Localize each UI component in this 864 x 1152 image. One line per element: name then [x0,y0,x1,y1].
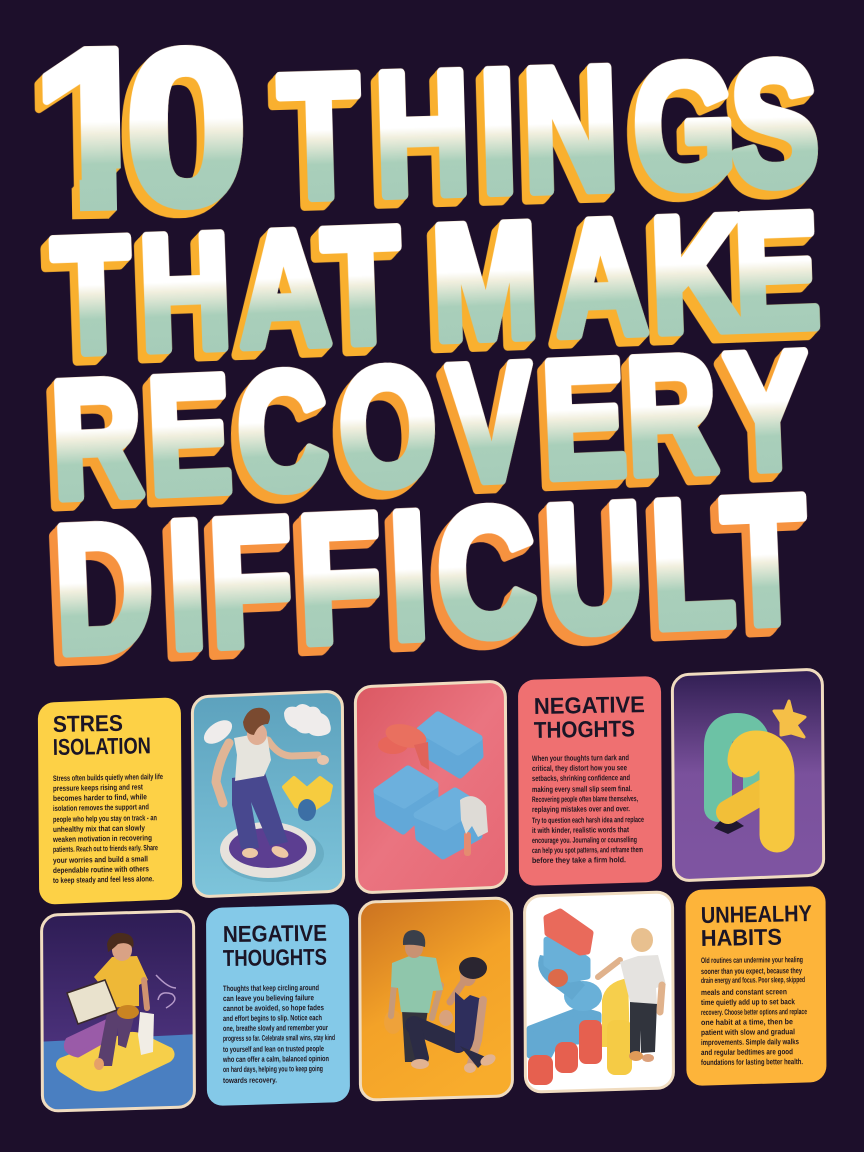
person with book [67,933,154,1070]
panel: person balancing illustration [190,690,346,898]
panel: negative thoughts blue text card: Thoughts that keep circling around [223,983,319,993]
panel: negative thoughts red text card: When your thoughts turn dark and [532,753,629,763]
panel: negative thoughts red text card: can help you spot patterns, and reframe them [532,845,643,855]
title line: RECOVERY: RECOVERY [48,316,813,534]
panel: unhealthy habits text card: meals and constant screen [701,987,787,997]
panel: negative thoughts blue text card: THOUGHTS [223,944,327,971]
panel: negative thoughts red text card: it with kinder, realistic words that [532,825,629,835]
panel: stress isolation text card: dependable routine with others [53,864,150,875]
panel: stress isolation text card: patients. Reach out to friends early. Share [53,843,158,854]
panel: negative thoughts blue text card: cannot be avoided, so hope fades [223,1003,325,1013]
standing person with glasses [598,928,666,1062]
panel: negative thoughts blue text card: to yourself and lean on trusted people [223,1044,324,1054]
icon: yellow arch [602,978,630,1047]
panel: negative thoughts red text card: before they take a firm hold. [532,855,626,865]
panel: green and yellow arches illustration [670,668,826,882]
icon: stacked blue shapes [530,938,602,1055]
panel: negative thoughts red text card: NEGATIVE [534,691,645,719]
panel: stress isolation text card: becomes harder to find, while [53,792,148,803]
panel: stress isolation text card [38,697,182,905]
panel: unhealthy habits text card: sooner than you expect, because they [701,966,802,976]
icon: pale squiggle [156,975,176,1008]
panel: negative thoughts red text card [518,676,662,886]
icon: clouds [204,704,331,744]
title digit: 0: 0 [123,3,250,253]
panel: negative thoughts red text card: Recovering people often blame themselves, [532,794,638,804]
panel: negative thoughts blue text card: and effort begins to slip. Notice each [223,1013,322,1023]
panel: unhealthy habits text card: drain energy and focus. Poor sleep, skipped [701,975,805,985]
panel: person with book illustration [40,910,196,1112]
panel: unhealthy habits text card: HABITS [701,924,782,951]
panel: stress isolation text card: to keep steady and feel less alone. [53,874,154,885]
panel: negative thoughts red text card: Try to question each harsh idea and replace [532,815,644,825]
icon: round platform [220,822,324,882]
panel: stress isolation text card: pressure keeps rising and rest [53,782,143,793]
panel: negative thoughts blue text card: towards recovery. [223,1076,277,1085]
person balancing [216,708,329,860]
panel: unhealthy habits text card: one habit at a time, then be [701,1017,794,1027]
panel: negative thoughts red text card: replaying mistakes over and over. [532,804,630,814]
panel: stress isolation text card: people who help you stay on track - an [53,813,157,824]
panel: stacked blocks illustration [523,890,675,1094]
panel: stress isolation text card: isolation removes the support and [53,802,149,813]
panel: unhealthy habits text card: patient with slow and gradual [701,1027,795,1037]
panel: negative thoughts blue text card: on hard days, helping you to keep going [223,1064,323,1074]
panel: negative thoughts red text card: encourage you. Journaling or counselling [532,835,637,845]
icon: yellow arch [745,748,777,835]
title line: DIFFICULT: DIFFICULT [50,458,811,693]
panel: negative thoughts blue text card: can leave you believing failure [223,993,315,1003]
title word: THINGS: THINGS [277,23,821,235]
panel: stress isolation text card: STRES [53,710,123,737]
panel: negative thoughts blue text card: who can offer a calm, balanced opinion [222,1054,329,1064]
panel: unhealthy habits text card: and regular bedtimes are good [701,1047,793,1057]
icon: purple cushion [66,1022,112,1055]
title line: THAT MAKE: THAT [50,193,404,389]
icon: white cloth on stick [460,796,488,856]
panel: unhealthy habits text card [686,886,826,1086]
panel: stress isolation text card: weaken motivation in recovering [52,833,152,844]
title digit: 1: 1 [29,1,161,257]
panel: negative thoughts red text card: THOGHTS [534,715,635,743]
icon: blue cube left [377,769,435,831]
panel: two people orange illustration [358,896,514,1102]
icon: red cylinders [528,1020,602,1085]
standing person [384,930,443,1062]
panel: unhealthy habits text card: UNHEALHY [701,900,812,928]
icon: yellow platform [56,1032,175,1092]
panel: negative thoughts blue text card [206,904,350,1106]
panel: negative thoughts blue text card: progress so far. Celebrate small wins, stay kind [223,1033,335,1043]
panel: negative thoughts red text card: making every small slip seem final. [532,784,632,794]
title [34,44,820,666]
panel: stress isolation text card: your worries and build a small [53,854,148,865]
panel: negative thoughts blue text card: NEGATIVE [223,920,327,947]
panel: unhealthy habits text card: Old routines can undermine your healing [701,955,803,965]
icon: pink mushroom shape [378,720,429,770]
title line: THAT MAKE: MAKE [429,179,823,376]
icon: blue cube top right [420,715,480,775]
panel: unhealthy habits text card: improvements. Simple daily walks [701,1037,800,1047]
icon: star [774,701,805,737]
icon: yellow cylinder [607,1020,632,1075]
panel: negative thoughts blue text card: one, breathe slowly and remember your [223,1023,328,1033]
seated person [411,957,497,1073]
icon: blue cube right [417,791,479,856]
panel: unhealthy habits text card: time quietly add up to set back [701,997,796,1007]
panel: unhealthy habits text card: foundations for lasting better health. [701,1057,803,1067]
icon: green arch [718,727,757,808]
panel: negative thoughts red text card: setbacks, shrinking confidence and [532,773,630,783]
panel: stress isolation text card: Stress often builds quietly when daily life [53,772,163,783]
panel: unhealthy habits text card: recovery. Choose better options and replace [701,1007,807,1017]
panel: negative thoughts red text card: critical, they distort how you see [532,763,628,773]
panel: stress isolation text card: ISOLATION [53,732,151,760]
panel: stress isolation text card: unhealthy mix that can slowly [53,823,146,834]
icon: red block on top [547,912,590,952]
icon: yellow heart and blue drop [284,778,331,821]
icon: yellow diagonal with dark tip [714,790,766,834]
panel: blue cubes illustration [354,680,508,894]
